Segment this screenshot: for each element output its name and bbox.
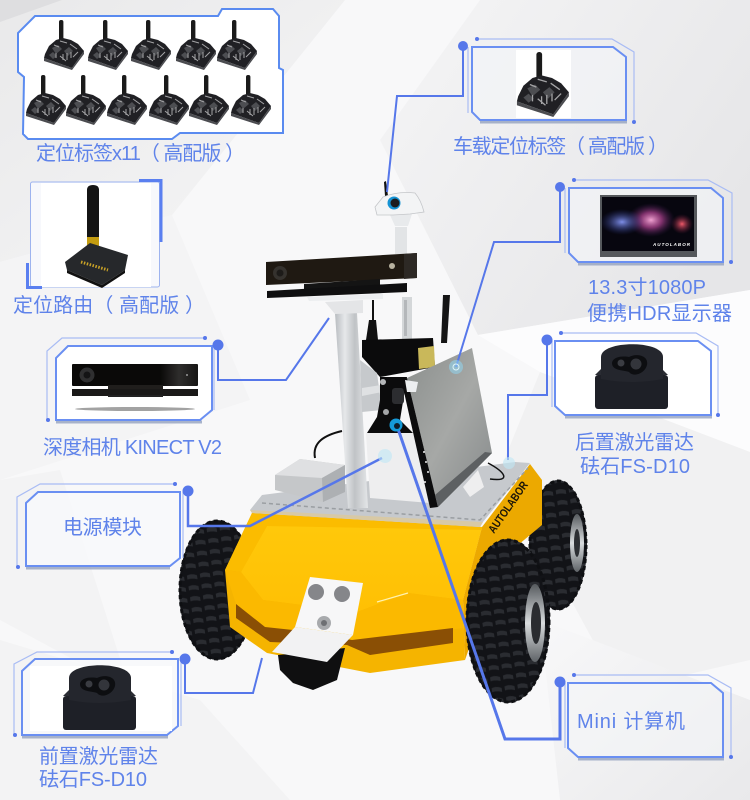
leader: mini computer (390, 418, 566, 739)
label: monitor: 13.3寸1080P (588, 276, 706, 299)
yellow chassis (225, 464, 542, 673)
leader: rear lidar (503, 334, 552, 469)
white pole and camera head (375, 181, 424, 254)
screen foot (463, 463, 504, 497)
monitor image (600, 195, 697, 257)
label: rear lidar (575, 431, 694, 478)
left front wheel (179, 520, 255, 660)
label: front lidar (39, 745, 158, 791)
panel: front lidar (13, 650, 181, 791)
label: on-board tag: 车载定位标签（ 高配版 ） (453, 135, 668, 158)
white box below the screen (366, 433, 430, 503)
leader: power module (182, 449, 392, 526)
aluminium column (307, 294, 383, 508)
panel: rear lidar (552, 331, 720, 478)
panel: mini computer (565, 673, 733, 759)
panel: power module (16, 482, 183, 569)
leader: kinect (212, 318, 329, 380)
robot (179, 181, 587, 703)
tablet screen (402, 348, 492, 508)
monitor image: AUTOLABOR (652, 242, 691, 247)
label: rear lidar: 砝石FS-D10 (580, 455, 690, 478)
mounting bracket (367, 377, 413, 433)
kinect on the mast (266, 253, 417, 298)
label: front lidar: 前置激光雷达 (39, 745, 158, 768)
panel: kinect depth camera (43, 336, 222, 459)
rear pole (402, 297, 412, 339)
leader: front lidar (180, 654, 262, 693)
label: monitor: 便携HDR显示器 (587, 302, 732, 325)
label: mini computer: Mini 计算机 (577, 710, 685, 733)
panel: on-board tag (453, 37, 668, 158)
rear right wheel (529, 480, 587, 610)
leader: on-board tag (387, 41, 468, 192)
label: power module: 电源模块 (63, 516, 142, 539)
panel: portable HDR monitor (565, 178, 733, 325)
label: kinect: 深度相机 KINECT V2 (43, 436, 222, 459)
kinect icon (72, 364, 198, 411)
panel: positioning tags x11 (18, 9, 283, 165)
leader: monitor (449, 182, 565, 374)
label: tags: 定位标签x11（ 高配版 ） (36, 142, 245, 165)
label: front lidar: 砝石FS-D10 (39, 768, 147, 791)
label: rear lidar: 后置激光雷达 (575, 431, 694, 454)
router with antennas (362, 295, 450, 377)
silver power box (275, 431, 345, 502)
label: router: 定位路由（ 高配版 ） (13, 294, 205, 317)
panel: positioning router (13, 180, 205, 317)
front lidar and white mount (272, 577, 363, 690)
label: monitor (587, 276, 732, 325)
top plate (250, 462, 530, 527)
yellow chassis: AUTOLABOR (487, 479, 531, 536)
front right wheel (466, 539, 550, 703)
